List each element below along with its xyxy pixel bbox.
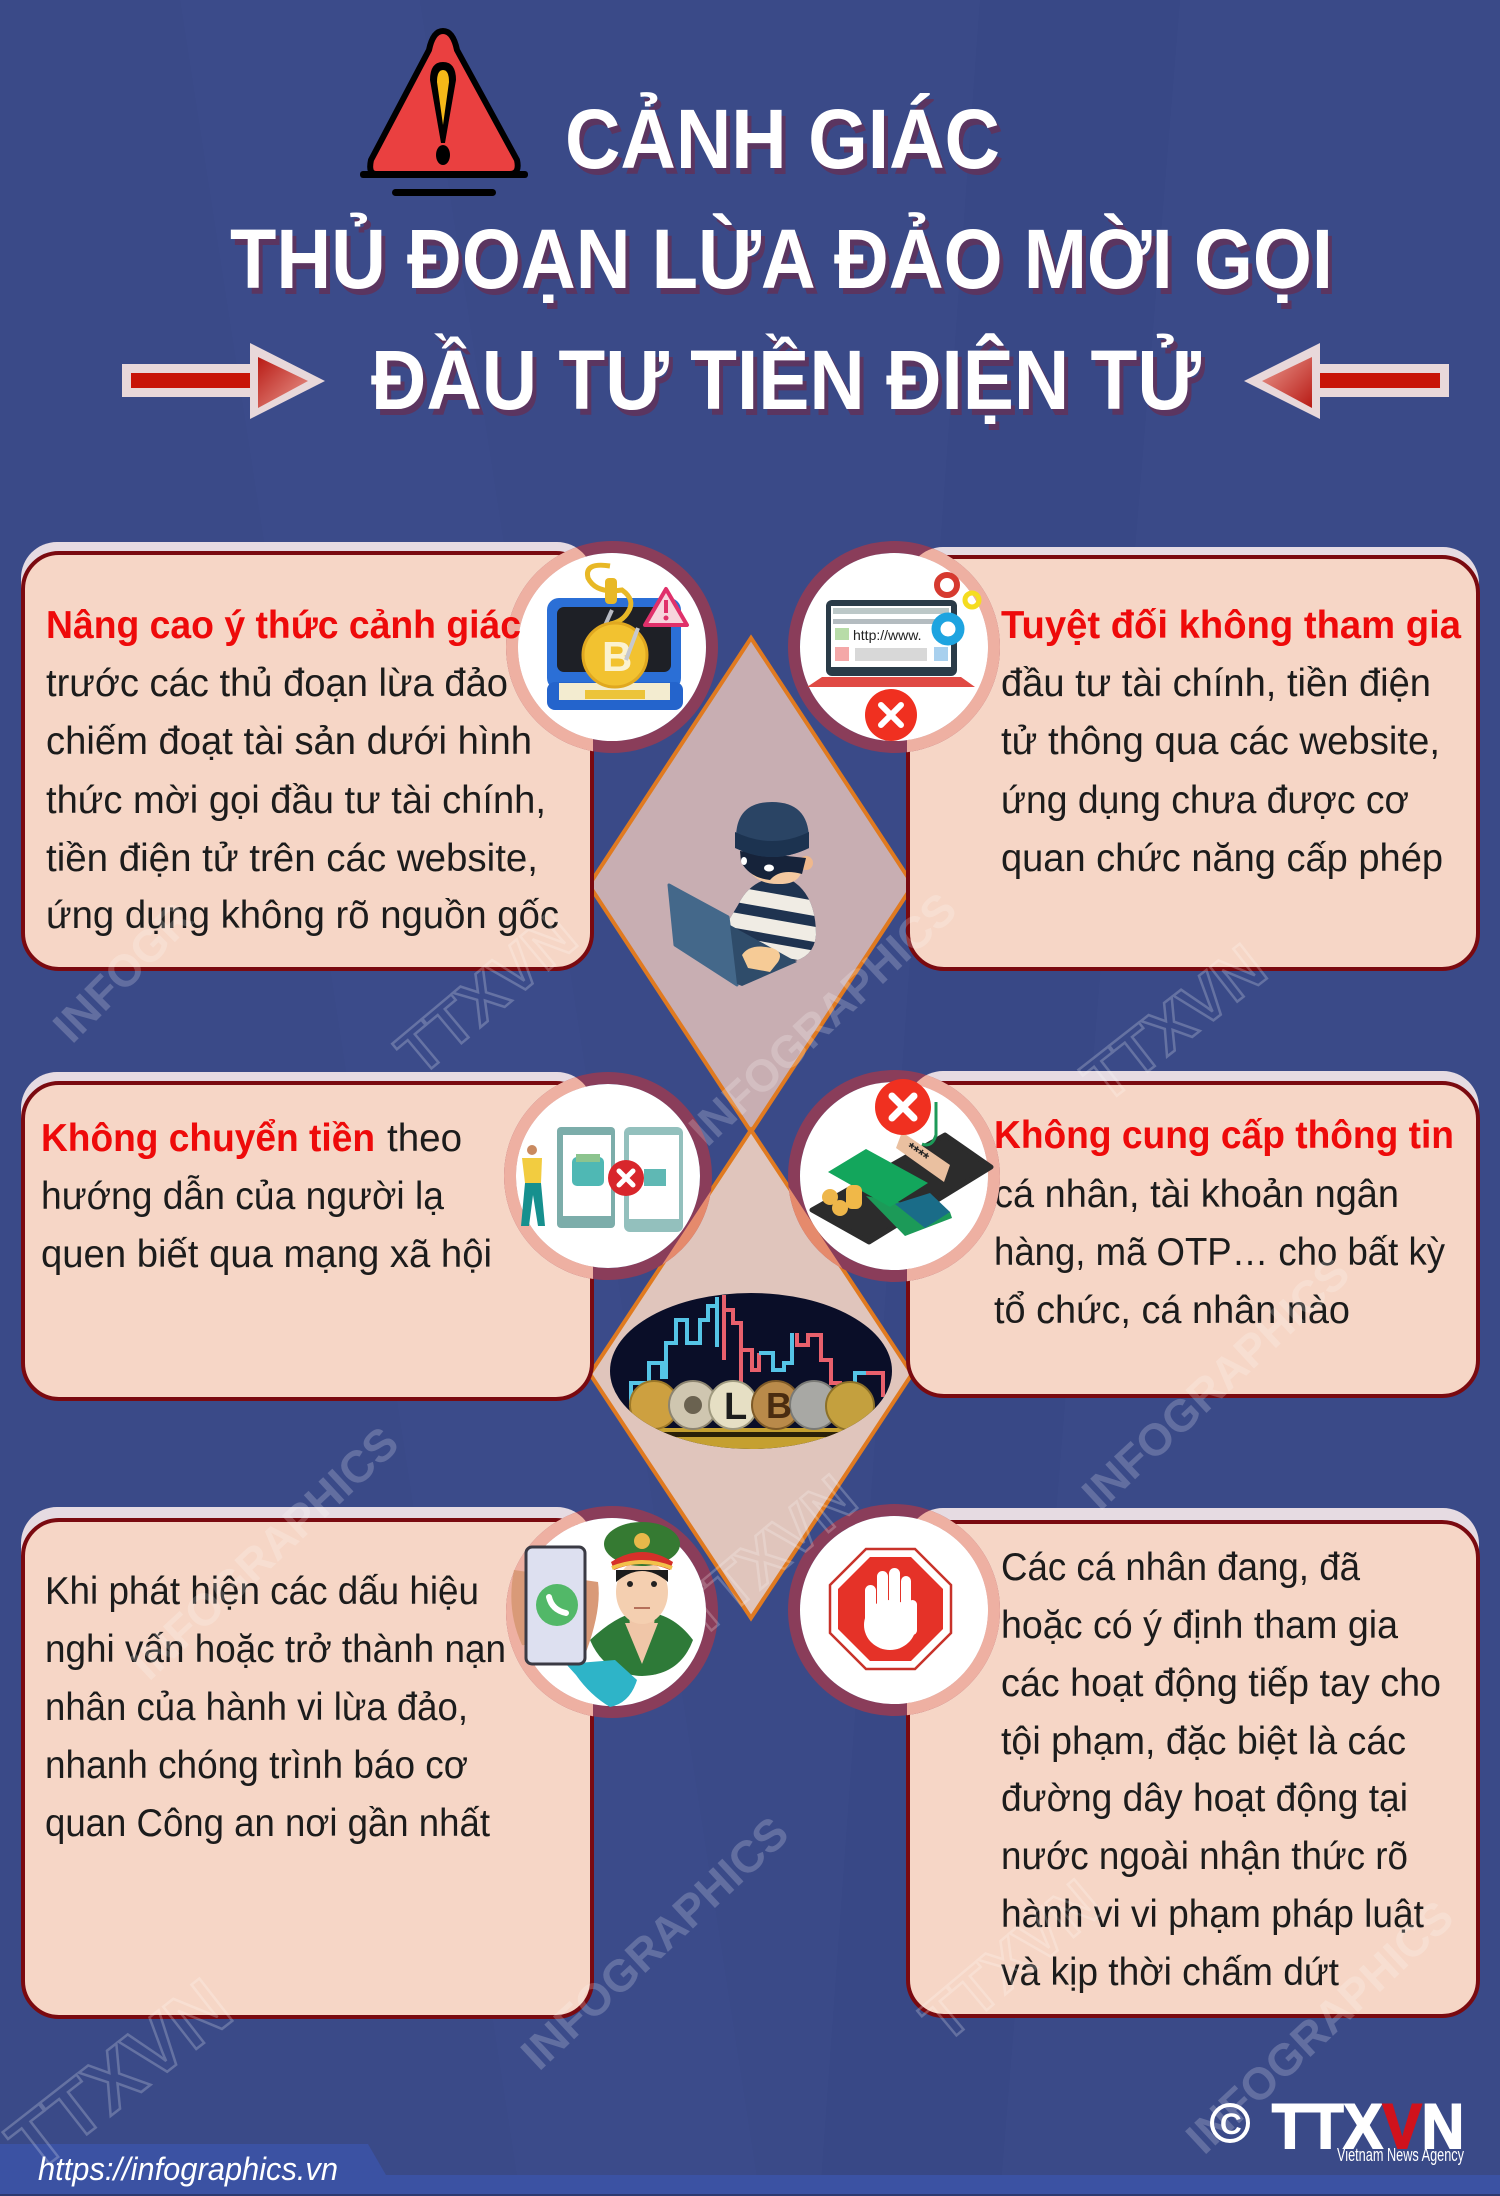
crypto chart oval: B <box>766 1385 792 1426</box>
watermarks: INFOGRAPHICS <box>121 1417 408 1689</box>
panel 3: do not transfer money <box>21 1072 593 1399</box>
title: ĐẦU TƯ TIỀN ĐIỆN TỬ <box>371 333 1201 427</box>
panel 5: report to police: nhanh chóng trình báo cơ <box>45 1744 468 1787</box>
icon: bitcoin on hook laptop: B <box>602 633 632 680</box>
panel 1: raise awareness: trước các thủ đoạn lừa đảo <box>46 662 508 705</box>
panel 5: report to police: nhân của hành vi lừa đảo, <box>45 1686 468 1729</box>
icon: phones with blocked transfer <box>510 1078 706 1274</box>
panel 4: do not share information <box>907 1071 1479 1396</box>
watermarks: TTXVN <box>908 1866 1115 2056</box>
heading: panel 2: Tuyệt đối không tham gia <box>1001 604 1461 647</box>
panel 4: do not share information: tổ chức, cá nhân nào <box>994 1289 1350 1332</box>
panel 6: stop illegal activity: tội phạm, đặc biệt là các <box>1001 1720 1406 1763</box>
icon: police officer and phone <box>511 1512 712 1712</box>
logo: TTXVN: C <box>1220 2108 1242 2141</box>
icon: unlicensed website laptop <box>794 547 994 747</box>
diamond: top <box>589 638 913 1132</box>
heading: panel 1: Nâng cao ý thức cảnh giác <box>46 604 521 647</box>
logo: TTXVN: TTXVN <box>1272 2092 1464 2162</box>
watermarks: TTXVN <box>383 899 590 1089</box>
panel 2: do not participate: đầu tư tài chính, tiền điện <box>1001 662 1431 705</box>
panel 6: stop illegal activity: các hoạt động tiếp tay cho <box>1001 1662 1441 1705</box>
crypto chart oval <box>610 1293 892 1452</box>
crypto chart oval: L <box>724 1386 747 1428</box>
panel 5: report to police: quan Công an nơi gần nhất <box>45 1802 490 1845</box>
watermarks: TTXVN <box>1069 930 1279 1116</box>
panel 1: raise awareness: ứng dụng không rõ nguồn gốc <box>46 894 559 937</box>
watermarks: INFOGRAPHICS <box>1176 1891 1463 2163</box>
panel 6: stop illegal activity: Các cá nhân đang, đã <box>1001 1546 1360 1589</box>
icon: cards and phishing hook: **** <box>903 1139 932 1167</box>
panel 1: raise awareness: chiếm đoạt tài sản dưới hình <box>46 720 532 763</box>
title: ĐẦU TƯ TIỀN ĐIỆN TỬ <box>375 339 1205 433</box>
panel 6: stop illegal activity: nước ngoài nhận thức rõ <box>1001 1835 1408 1878</box>
panel 5: report to police: nghi vấn hoặc trở thành nạn <box>45 1628 506 1671</box>
panel 6: stop illegal activity: đường dây hoạt động tại <box>1001 1777 1408 1820</box>
panel 2: do not participate: quan chức năng cấp phép <box>1001 837 1443 880</box>
panel 6: stop illegal activity: hoặc có ý định tham gia <box>1001 1604 1398 1647</box>
watermarks: INFOGRAPHICS <box>1072 1247 1359 1519</box>
panel 6: stop illegal activity: hành vi vi phạm pháp luật <box>1001 1893 1424 1936</box>
title: CẢNH GIÁC <box>565 92 1000 186</box>
panel 1: raise awareness: thức mời gọi đầu tư tài chính, <box>46 779 546 822</box>
title: CẢNH GIÁC <box>569 98 1004 192</box>
panel 2: do not participate: tử thông qua các website, <box>1001 720 1440 763</box>
title <box>230 92 1337 433</box>
arrow: right pointing left <box>1244 343 1449 419</box>
icon: bitcoin on hook laptop <box>512 547 712 747</box>
title: THỦ ĐOẠN LỪA ĐẢO MỜI GỌI <box>234 218 1337 312</box>
panel 4: do not share information: cá nhân, tài khoản ngân <box>994 1173 1399 1216</box>
watermarks: INFOGRAPHICS <box>511 1807 798 2079</box>
panel 2: do not participate: ứng dụng chưa được cơ <box>1001 779 1409 822</box>
panel 1: raise awareness: tiền điện tử trên các website, <box>46 837 538 880</box>
panel 5: report to police: Khi phát hiện các dấu hiệu <box>45 1570 479 1613</box>
icon: cards and phishing hook <box>794 1076 994 1276</box>
watermarks: INFOGRAPHICS <box>679 883 966 1155</box>
panel 5: report to police <box>21 1507 593 2017</box>
icon: unlicensed website laptop: http://www. <box>853 627 921 643</box>
panel 3: do not transfer money: quen biết qua mạng xã hội <box>41 1233 492 1276</box>
diamond: bottom <box>590 1130 912 1618</box>
panel 6: stop illegal activity <box>907 1508 1479 2016</box>
watermarks: INFOGR <box>43 892 203 1052</box>
panel 4: do not share information: hàng, mã OTP… cho bất kỳ <box>994 1231 1445 1274</box>
panel 3: do not transfer money: hướng dẫn của người lạ <box>41 1175 444 1218</box>
watermarks: TTXVN <box>663 1461 870 1651</box>
icon: stop hand sign <box>794 1510 994 1710</box>
panel 3: do not transfer money: Không chuyển tiền <box>41 1117 375 1160</box>
panel 1: raise awareness <box>21 542 593 969</box>
arrow: left pointing right <box>122 343 325 419</box>
title: THỦ ĐOẠN LỪA ĐẢO MỜI GỌI <box>230 212 1333 306</box>
footer band <box>0 2144 1500 2196</box>
panel 3: do not transfer money: theo <box>387 1117 462 1160</box>
watermarks <box>0 883 1463 2188</box>
heading: panel 4: Không cung cấp thông tin <box>994 1114 1454 1157</box>
panel 2: do not participate <box>907 547 1479 969</box>
panel 6: stop illegal activity: và kịp thời chấm dứt <box>1001 1951 1339 1994</box>
icon: thief at laptop <box>669 802 831 986</box>
icon: warning triangle <box>360 31 528 196</box>
footer url: https://infographics.vn <box>38 2151 338 2187</box>
